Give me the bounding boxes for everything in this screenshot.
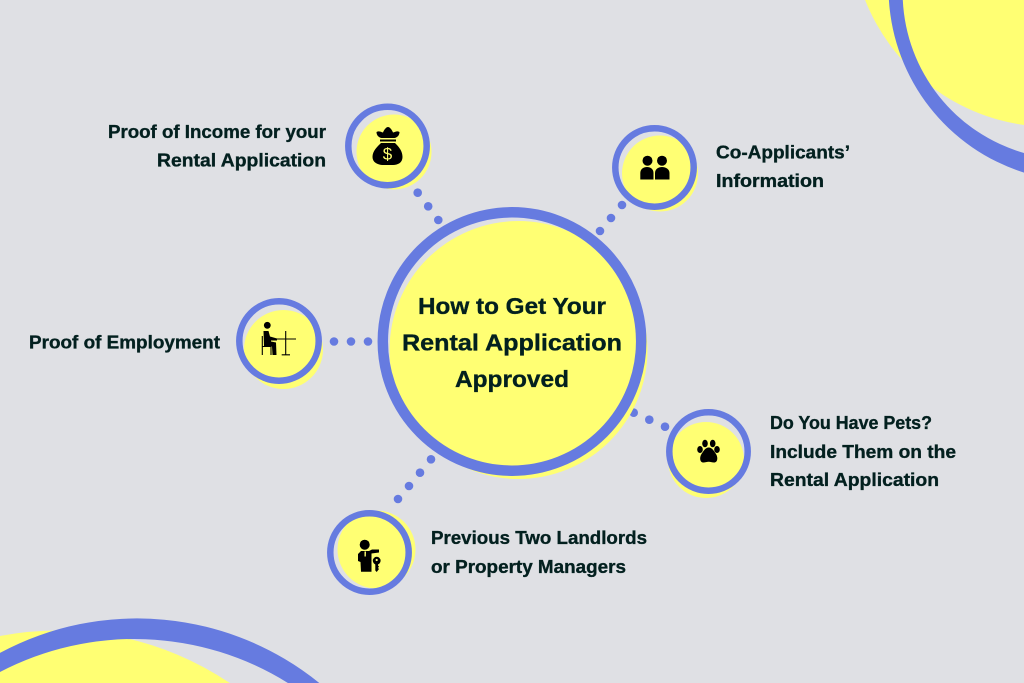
title	[402, 293, 622, 392]
label: landlords: Previous Two Landlords	[431, 528, 647, 548]
node: pets	[668, 412, 748, 498]
label: co-applicants	[716, 142, 850, 191]
title: Rental Application	[402, 330, 622, 356]
bottom-left corner decoration	[0, 618, 319, 683]
connector dots: landlords	[394, 455, 435, 503]
connector dots: co-applicants	[596, 201, 626, 235]
label: proof of income: Proof of Income for your	[108, 122, 326, 142]
label: co-applicants: Information	[716, 171, 824, 191]
icon: paw print	[697, 440, 720, 462]
connector dots: proof of income	[413, 188, 443, 224]
title: Approved	[455, 366, 569, 392]
title: How to Get Your	[418, 293, 606, 319]
node: co-applicants	[615, 128, 698, 212]
label: proof of employment: Proof of Employment	[29, 332, 220, 352]
connector dots: proof of employment	[330, 337, 372, 346]
connector dots: pets	[629, 408, 669, 431]
node: proof of income	[348, 107, 432, 190]
label: pets: Do You Have Pets?	[770, 413, 932, 433]
top-right corner decoration	[865, 0, 1024, 173]
label: landlords: or Property Managers	[431, 557, 626, 577]
icon: landlord with key	[358, 540, 381, 572]
label: pets	[770, 413, 956, 490]
label: proof of income: Rental Application	[157, 150, 326, 170]
icon: person at desk	[262, 322, 296, 355]
icon: money bag: $	[383, 144, 393, 164]
node: proof of employment	[239, 301, 323, 389]
label: pets: Rental Application	[770, 470, 939, 490]
icon: two people	[640, 156, 670, 180]
label: landlords	[431, 528, 647, 577]
node: landlords	[330, 510, 416, 592]
label: pets: Include Them on the	[770, 442, 956, 462]
label: co-applicants: Co-Applicants’	[716, 142, 850, 162]
central hub circle with title	[383, 212, 648, 479]
label: proof of income	[108, 122, 326, 170]
